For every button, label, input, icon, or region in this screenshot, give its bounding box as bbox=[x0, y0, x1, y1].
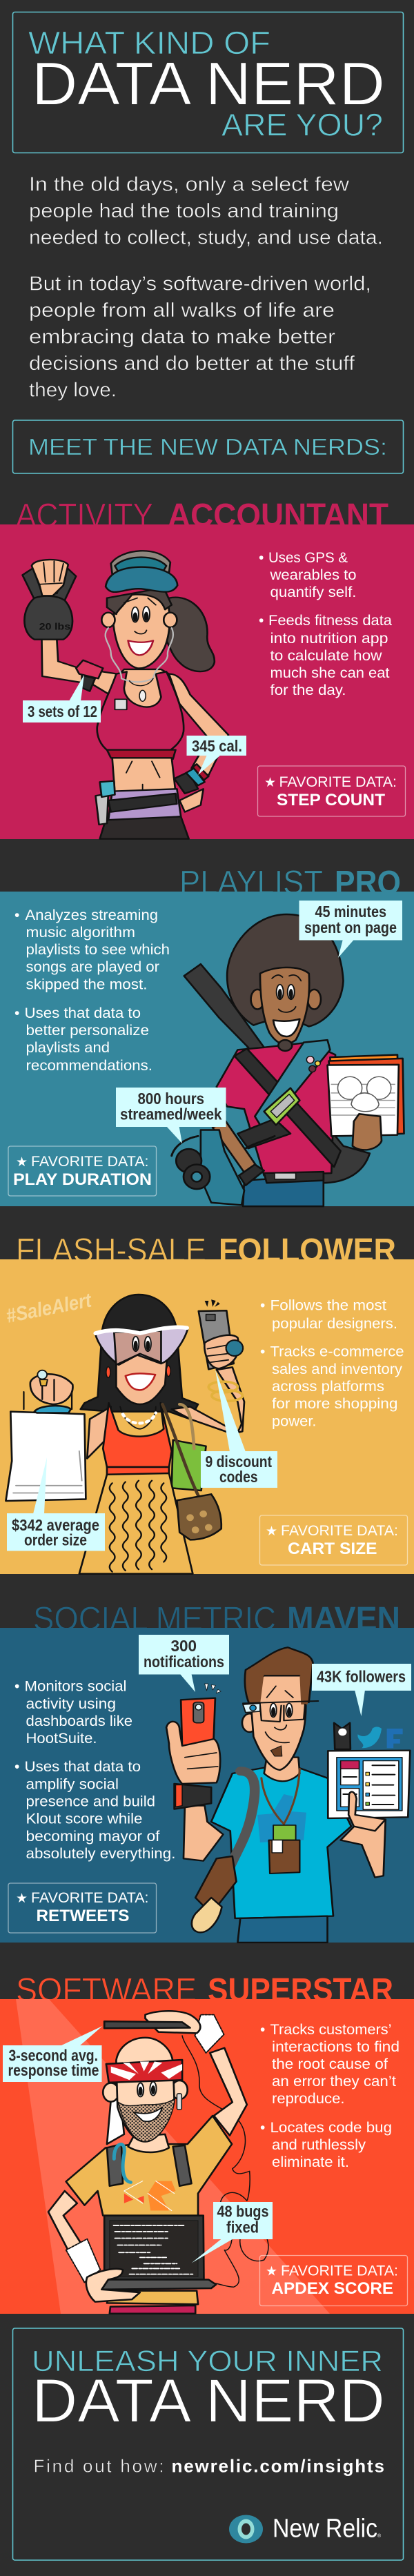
bullet list: and ruthlessly bbox=[272, 2137, 366, 2153]
callout: 45 minutes spent on page: spent on page bbox=[304, 918, 397, 936]
intro text block: they love. bbox=[29, 380, 117, 402]
bullet list: • bbox=[259, 550, 264, 566]
favorite data: play duration bbox=[8, 1146, 156, 1196]
callout: 800 hours streamed/week: streamed/week bbox=[120, 1105, 222, 1123]
panel: playlist pro bbox=[0, 892, 414, 1206]
favorite data: cart size bbox=[259, 1515, 407, 1565]
callout: 48 bugs fixed: fixed bbox=[226, 2218, 259, 2236]
bullet list: activity using bbox=[26, 1696, 116, 1712]
bullet list: • bbox=[260, 1297, 265, 1314]
callout: 300 notifications: 300 bbox=[171, 1637, 197, 1655]
heading: social metric maven bbox=[33, 1601, 400, 1638]
heading: software superstar: SUPERSTAR bbox=[208, 1972, 393, 2009]
callout: 3 sets of 12 bbox=[23, 675, 101, 722]
bullet list: songs are played or bbox=[26, 959, 159, 975]
favorite data: apdex score: APDEX SCORE bbox=[272, 2279, 393, 2298]
bullet list: • bbox=[14, 907, 19, 923]
bullet list bbox=[259, 550, 392, 698]
callout: 43K followers bbox=[312, 1664, 411, 1716]
favorite data: play duration: PLAY DURATION bbox=[13, 1170, 152, 1189]
favorite data: retweets: RETWEETS bbox=[36, 1907, 130, 1925]
bullet list: the root cause of bbox=[272, 2056, 388, 2072]
callout: 345 cal.: 345 cal. bbox=[192, 737, 242, 755]
bullet list: amplify social bbox=[26, 1776, 119, 1793]
favorite data: apdex score bbox=[259, 2255, 407, 2306]
callout: 300 notifications bbox=[139, 1635, 229, 1692]
favorite data: play duration: ★ bbox=[16, 1154, 28, 1170]
bullet list: popular designers. bbox=[272, 1316, 397, 1332]
bullet list bbox=[14, 1678, 175, 1862]
callout: 9 discount codes: 9 discount bbox=[206, 1453, 272, 1471]
bullet list: Tracks customers’ bbox=[270, 2022, 392, 2038]
intro text block: needed to collect, study, and use data. bbox=[29, 226, 383, 248]
callout: 3-second avg. response time: response time bbox=[8, 2061, 99, 2079]
callout: 45 minutes spent on page bbox=[299, 901, 402, 958]
illustration: activity accountant figure bbox=[23, 551, 228, 839]
callout: 45 minutes spent on page: 45 minutes bbox=[315, 903, 386, 921]
heading: flash-sale follower: FOLLOWER bbox=[219, 1232, 396, 1269]
favorite data: retweets: ★ bbox=[16, 1891, 28, 1906]
favorite data: play duration: FAVORITE DATA: bbox=[31, 1154, 149, 1170]
bullet list: into nutrition app bbox=[270, 631, 388, 647]
bullet list: • bbox=[14, 1678, 19, 1695]
favorite data: step count: ★ bbox=[264, 775, 276, 790]
callout: 48 bugs fixed bbox=[192, 2202, 273, 2263]
illustration: flash-sale follower figure bbox=[6, 1295, 244, 1574]
heading: activity accountant bbox=[16, 498, 388, 534]
call to action bbox=[33, 2455, 384, 2476]
heading: activity accountant: ACTIVITY bbox=[16, 498, 153, 534]
bullet list: sales and inventory bbox=[272, 1361, 403, 1377]
heading: social metric maven: MAVEN bbox=[287, 1601, 400, 1638]
intro text block: people from all walks of life are bbox=[29, 299, 335, 322]
favorite data: step count: STEP COUNT bbox=[277, 791, 385, 809]
title panel bbox=[12, 12, 403, 153]
bullet list: • bbox=[14, 1759, 19, 1775]
bullet list: Feeds fitness data bbox=[268, 613, 392, 629]
bullet list: playlists to see which bbox=[26, 942, 170, 958]
panel: flash-sale follower bbox=[0, 1259, 414, 1574]
favorite data: step count: FAVORITE DATA: bbox=[279, 774, 397, 790]
bullet list: reproduce. bbox=[272, 2091, 345, 2107]
bullet list: Tracks e-commerce bbox=[270, 1344, 404, 1359]
hashtag: #SaleAlert: #SaleAlert bbox=[4, 1289, 94, 1328]
bullet list: interactions to find bbox=[272, 2039, 400, 2055]
intro text block: But in today’s software-driven world, bbox=[29, 273, 371, 295]
callout: 3 sets of 12: 3 sets of 12 bbox=[28, 702, 97, 720]
bullet list bbox=[14, 907, 170, 1074]
title panel: DATA NERD bbox=[32, 50, 385, 117]
bullet list: Follows the most bbox=[270, 1297, 386, 1314]
bullet list: presence and build bbox=[26, 1794, 155, 1809]
favorite data: retweets bbox=[8, 1883, 156, 1933]
favorite data: cart size: ★ bbox=[266, 1524, 277, 1539]
bullet list: • bbox=[260, 2120, 265, 2136]
favorite data: retweets: FAVORITE DATA: bbox=[31, 1890, 149, 1906]
callout: $342 average order size bbox=[7, 1457, 105, 1551]
bullet list: eliminate it. bbox=[272, 2154, 349, 2170]
intro text block: embracing data to make better bbox=[29, 326, 335, 348]
callout: 800 hours streamed/week bbox=[116, 1088, 226, 1143]
callout: 48 bugs fixed: 48 bugs bbox=[217, 2203, 269, 2221]
panel: activity accountant bbox=[0, 524, 414, 839]
favorite data: step count bbox=[258, 766, 406, 816]
favorite data: cart size: CART SIZE bbox=[288, 1540, 377, 1558]
callout: 3-second avg. response time bbox=[3, 2026, 102, 2082]
callout: $342 average order size: order size bbox=[24, 1531, 87, 1548]
heading: flash-sale follower: FLASH-SALE bbox=[16, 1232, 206, 1269]
bullet list: quantify self. bbox=[270, 584, 356, 600]
bullet list: wearables to bbox=[269, 567, 356, 583]
closing heading: DATA NERD bbox=[32, 2366, 385, 2435]
heading: playlist pro bbox=[179, 865, 401, 901]
closing heading: UNLEASH YOUR INNER bbox=[32, 2345, 383, 2378]
illustration: software superstar figure bbox=[48, 2011, 268, 2314]
meet the nerds banner: MEET THE NEW DATA NERDS: bbox=[28, 434, 387, 460]
bullet list: across platforms bbox=[272, 1379, 384, 1395]
callout: 9 discount codes bbox=[201, 1370, 277, 1488]
callout: $342 average order size: $342 average bbox=[12, 1516, 99, 1534]
heading: software superstar: SOFTWARE bbox=[16, 1972, 197, 2009]
bullet list: skipped the most. bbox=[26, 977, 148, 992]
bullet list: to calculate how bbox=[270, 648, 382, 664]
callout: 345 cal. bbox=[186, 736, 246, 775]
bullet list bbox=[260, 1297, 404, 1430]
bullet list: music algorithm bbox=[26, 925, 135, 941]
bullet list: Uses that data to bbox=[25, 1005, 141, 1021]
heading: software superstar bbox=[16, 1972, 393, 2009]
bullet list: for more shopping bbox=[272, 1396, 397, 1412]
title panel: WHAT KIND OF bbox=[28, 25, 270, 61]
callout: 3-second avg. response time: 3-second avg. bbox=[8, 2047, 98, 2065]
bullet list: an error they can’t bbox=[272, 2074, 396, 2090]
callout: 800 hours streamed/week: 800 hours bbox=[138, 1090, 204, 1108]
favorite data: cart size: FAVORITE DATA: bbox=[281, 1523, 398, 1539]
call to action: newrelic.com/insights bbox=[171, 2455, 384, 2476]
bullet list: dashboards like bbox=[26, 1713, 132, 1729]
logo: new relic: ® bbox=[377, 2533, 382, 2539]
callout: 9 discount codes: codes bbox=[219, 1468, 258, 1486]
illustration: activity accountant figure: 20 lbs bbox=[39, 622, 70, 632]
bullet list: better personalize bbox=[26, 1023, 149, 1039]
bullet list: Monitors social bbox=[25, 1678, 127, 1695]
logo: new relic: New Relic bbox=[273, 2515, 377, 2544]
intro text block: In the old days, only a select few bbox=[29, 174, 350, 196]
intro text block bbox=[29, 174, 383, 402]
bullet list: for the day. bbox=[270, 682, 346, 698]
bullet list: Klout score while bbox=[26, 1811, 142, 1827]
heading: playlist pro: PRO bbox=[335, 865, 401, 901]
heading: playlist pro: PLAYLIST bbox=[179, 865, 323, 901]
illustration: playlist pro figure bbox=[172, 914, 404, 1206]
bullet list: playlists and bbox=[26, 1040, 110, 1056]
bullet list: • bbox=[14, 1005, 19, 1021]
bullet list: • bbox=[260, 2022, 265, 2038]
intro text block: people had the tools and training bbox=[29, 200, 339, 222]
heading: activity accountant: ACCOUNTANT bbox=[168, 498, 388, 534]
favorite data: apdex score: FAVORITE DATA: bbox=[281, 2263, 398, 2279]
spotlight beam bbox=[16, 1999, 330, 2314]
bullet list: Locates code bug bbox=[270, 2120, 392, 2136]
bullet list: Analyzes streaming bbox=[25, 907, 158, 923]
intro text block: decisions and do better at the stuff bbox=[29, 353, 355, 375]
bullet list: • bbox=[259, 613, 264, 629]
meet the nerds banner bbox=[12, 420, 403, 473]
bullet list: much she can eat bbox=[270, 665, 390, 681]
heading: social metric maven: SOCIAL METRIC bbox=[33, 1601, 276, 1638]
bullet list: absolutely everything. bbox=[26, 1846, 175, 1862]
bullet list: HootSuite. bbox=[26, 1731, 97, 1747]
logo: new relic bbox=[229, 2515, 382, 2544]
closing panel bbox=[12, 2328, 403, 2560]
bullet list: power. bbox=[272, 1413, 316, 1430]
title panel: ARE YOU? bbox=[221, 108, 383, 142]
panel: software superstar bbox=[0, 1999, 414, 2314]
bullet list bbox=[260, 2022, 400, 2170]
bullet list: becoming mayor of bbox=[26, 1829, 160, 1845]
bullet list: Uses GPS & bbox=[268, 550, 348, 566]
callout: 300 notifications: notifications bbox=[144, 1653, 224, 1671]
call to action: Find out how: bbox=[33, 2455, 164, 2476]
panel: social metric maven bbox=[0, 1628, 414, 1943]
bullet list: recommendations. bbox=[26, 1058, 152, 1074]
bullet list: Uses that data to bbox=[25, 1759, 141, 1775]
bullet list: • bbox=[260, 1344, 265, 1359]
favorite data: apdex score: ★ bbox=[266, 2263, 277, 2279]
illustration: social metric maven figure bbox=[166, 1647, 410, 1943]
heading: flash-sale follower bbox=[16, 1232, 396, 1269]
